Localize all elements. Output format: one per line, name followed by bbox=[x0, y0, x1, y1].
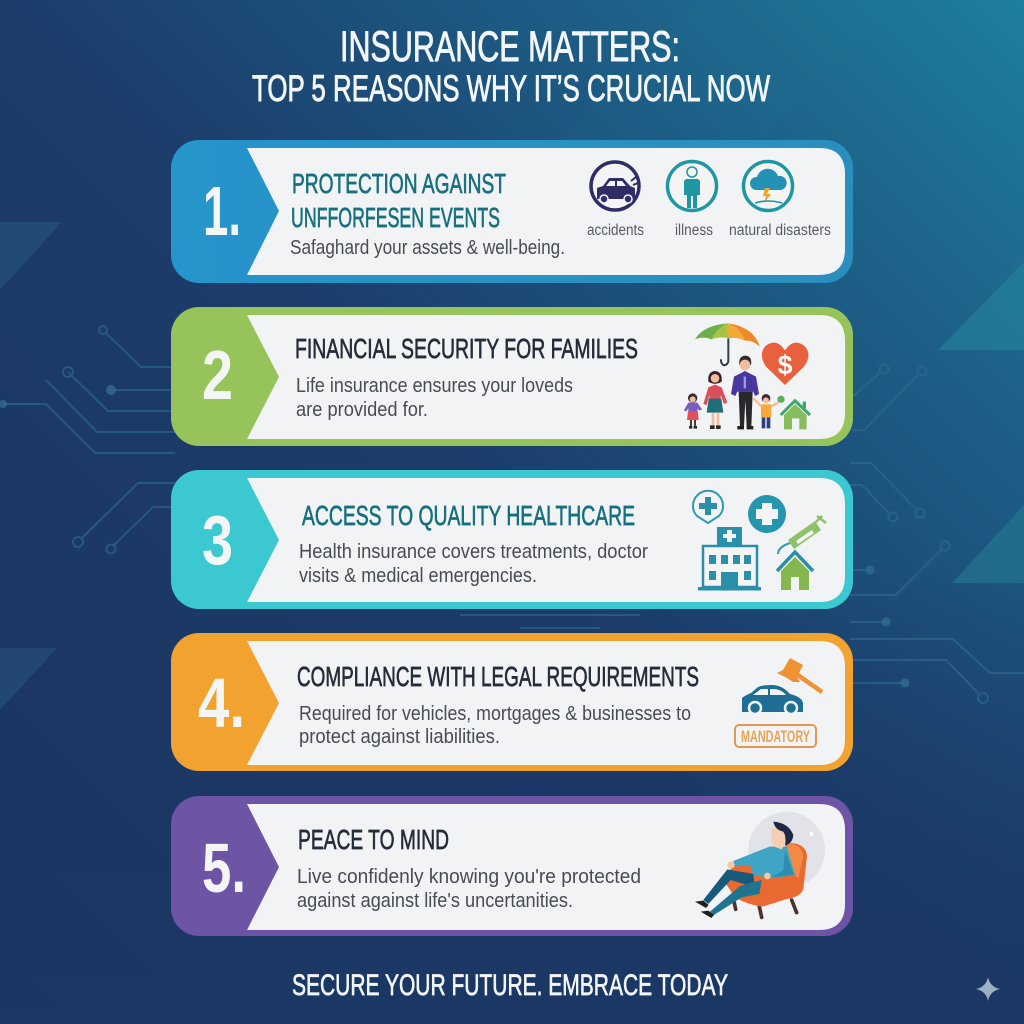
number 4: 4. bbox=[198, 664, 245, 742]
panel: reason 3 bbox=[171, 470, 853, 609]
number 5: 5. bbox=[202, 829, 246, 907]
icon: illness bbox=[668, 162, 716, 210]
footer tagline: SECURE YOUR FUTURE. EMBRACE TODAY bbox=[292, 969, 728, 1002]
title: TOP 5 REASONS WHY IT’S CRUCIAL NOW bbox=[252, 68, 770, 109]
description 5: Live confidenly knowing you're protected bbox=[297, 866, 641, 888]
heading 4: COMPLIANCE WITH LEGAL REQUIREMENTS bbox=[297, 661, 699, 692]
icon: family under umbrella: $ bbox=[778, 350, 793, 380]
description 4: protect against liabilities. bbox=[299, 726, 500, 748]
heading 1 bbox=[291, 168, 506, 233]
icon: gavel and car bbox=[742, 658, 822, 714]
icon: healthcare bbox=[693, 491, 826, 590]
label natural disasters: natural disasters bbox=[729, 222, 831, 239]
title bbox=[252, 23, 770, 109]
heading 1: PROTECTION AGAINST bbox=[292, 168, 506, 199]
description 3 bbox=[299, 541, 648, 587]
description 5: against against life's uncertanities. bbox=[297, 890, 573, 912]
description 4: Required for vehicles, mortgages & businesses to bbox=[299, 703, 691, 725]
title: INSURANCE MATTERS: bbox=[340, 23, 680, 71]
description 3: visits & medical emergencies. bbox=[299, 565, 537, 587]
panel: reason 5 bbox=[171, 796, 853, 936]
heading 5: PEACE TO MIND bbox=[298, 824, 449, 855]
icon: natural disasters bbox=[744, 162, 792, 210]
number 3: 3 bbox=[202, 501, 233, 579]
label accidents: accidents bbox=[587, 222, 644, 239]
description 1: Safaghard your assets & well-being. bbox=[290, 237, 565, 259]
description 2 bbox=[296, 375, 573, 421]
description 3: Health insurance covers treatments, doctor bbox=[299, 541, 648, 563]
description 5 bbox=[297, 866, 641, 912]
number 2: 2 bbox=[202, 336, 233, 414]
panel: reason 4 bbox=[171, 633, 853, 771]
icon: man relaxing in armchair bbox=[695, 812, 825, 918]
icon: sparkle bbox=[976, 977, 1000, 1001]
description 4 bbox=[299, 703, 691, 748]
heading 3: ACCESS TO QUALITY HEALTHCARE bbox=[302, 500, 635, 531]
panel: reason 2 bbox=[171, 307, 853, 446]
icon: family under umbrella bbox=[684, 323, 810, 429]
description 2: are provided for. bbox=[296, 399, 428, 421]
heading 2: FINANCIAL SECURITY FOR FAMILIES bbox=[295, 333, 638, 364]
badge: mandatory bbox=[735, 725, 816, 747]
badge: mandatory: MANDATORY bbox=[741, 728, 810, 746]
number 1: 1. bbox=[203, 172, 241, 250]
heading 1: UNFFORFESEN EVENTS bbox=[291, 202, 500, 233]
label illness: illness bbox=[675, 222, 713, 239]
description 2: Life insurance ensures your loveds bbox=[296, 375, 573, 397]
icon: accidents bbox=[591, 162, 639, 210]
panel: reason 1 bbox=[171, 140, 853, 283]
